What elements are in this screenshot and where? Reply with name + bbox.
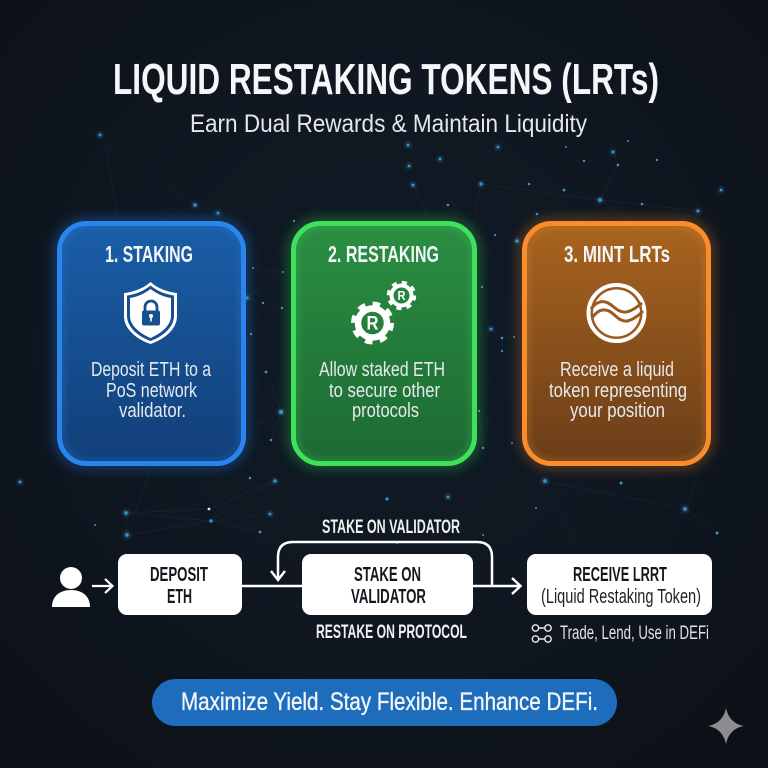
network dots background — [18, 132, 724, 544]
banner: tagline — [152, 679, 617, 726]
box: deposit ETH — [118, 554, 242, 615]
label: trade, lend, use in DeFi: Trade, Lend, Use in DEFi — [560, 623, 709, 644]
heading: staking: 1. STAKING — [105, 241, 193, 267]
icon: user — [52, 567, 90, 607]
icon: shield with lock — [124, 282, 177, 344]
text: mint description — [549, 359, 687, 422]
icon: gears — [354, 282, 414, 342]
icon: connected nodes — [532, 625, 551, 642]
box: stake on validator: STAKE ON — [354, 564, 421, 586]
text: restaking description: protocols — [352, 400, 419, 422]
label: stake on validator: STAKE ON VALIDATOR — [322, 517, 460, 538]
connector: deposit to stake — [242, 585, 302, 587]
box: stake on validator: VALIDATOR — [351, 586, 426, 608]
icon: sparkle — [708, 708, 744, 744]
arrow: loop back — [271, 542, 492, 586]
arrow: user to deposit — [92, 579, 112, 593]
box: receive LRRT — [527, 554, 712, 615]
icon: liquid token — [588, 285, 644, 341]
text: staking description: validator. — [119, 400, 186, 422]
panel: restaking — [292, 222, 476, 465]
icon: gears: R — [366, 314, 379, 334]
box: receive LRRT: RECEIVE LRRT — [573, 564, 667, 586]
label: restake on protocol: RESTAKE ON PROTOCOL — [316, 622, 467, 643]
text: staking description — [91, 359, 212, 422]
text: mint description: your position — [570, 400, 665, 422]
panel: mint LRTs — [523, 222, 710, 465]
box: receive LRRT: (Liquid Restaking Token) — [541, 586, 701, 608]
arrow: stake to receive — [473, 578, 520, 594]
panel: staking — [58, 222, 245, 465]
text: restaking description — [319, 359, 445, 422]
banner: tagline: Maximize Yield. Stay Flexible. Enhance DEFi. — [181, 688, 598, 716]
box: stake on validator — [302, 554, 473, 615]
box: deposit ETH: DEPOSIT — [150, 564, 208, 586]
text: staking description: Deposit ETH to a — [91, 359, 212, 381]
text: restaking description: to secure other — [329, 380, 440, 402]
box: deposit ETH: ETH — [167, 586, 192, 608]
heading: restaking: 2. RESTAKING — [328, 241, 439, 267]
heading: mint LRTs: 3. MINT LRTs — [564, 241, 670, 267]
text: staking description: PoS network — [106, 380, 198, 402]
text: restaking description: Allow staked ETH — [319, 359, 445, 381]
text: mint description: token representing — [549, 380, 687, 402]
icon: gears: R — [398, 289, 406, 303]
flow diagram — [52, 517, 712, 644]
text: mint description: Receive a liquid — [560, 359, 674, 381]
subtitle: Earn Dual Rewards & Maintain Liquidity — [190, 110, 587, 138]
network lines background — [100, 140, 717, 590]
